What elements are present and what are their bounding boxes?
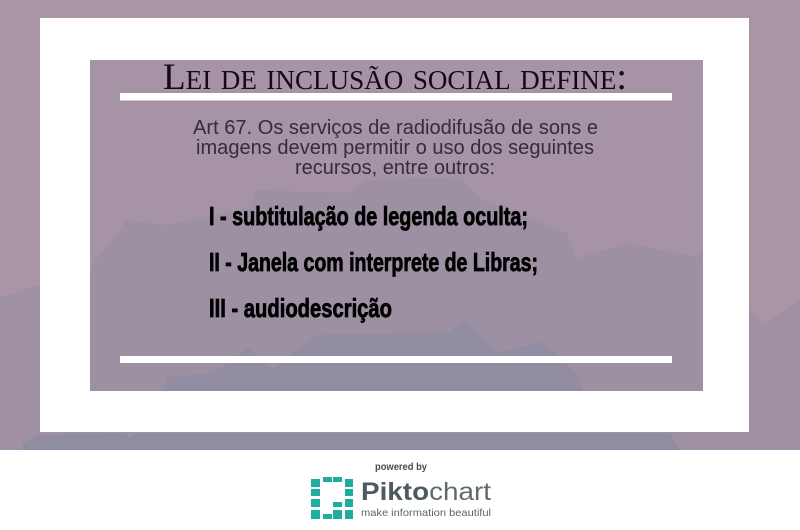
list of resources — [209, 201, 538, 323]
title: Lei de inclusão social define: — [163, 56, 627, 98]
powered by label: powered by — [375, 462, 427, 473]
article text: recursos, entre outros: — [295, 157, 495, 179]
bottom divider — [120, 356, 672, 363]
tagline: make information beautiful — [361, 507, 491, 519]
article text: imagens devem permitir o uso dos seguintes — [196, 137, 594, 159]
item II: II - Janela com interprete de Libras; — [209, 247, 538, 277]
white outer frame — [40, 18, 749, 432]
article text: Art 67. Os serviços de radiodifusão de sons e — [193, 117, 598, 139]
item III: III - audiodescrição — [209, 293, 392, 323]
item I: I - subtitulação de legenda oculta; — [209, 201, 528, 231]
top divider — [120, 93, 672, 100]
central panel — [90, 60, 703, 391]
article text — [193, 117, 598, 179]
footer: white strip — [0, 450, 800, 530]
Piktochart wordmark: Pikto chart — [361, 478, 491, 506]
icon: Piktochart logo — [311, 477, 353, 519]
